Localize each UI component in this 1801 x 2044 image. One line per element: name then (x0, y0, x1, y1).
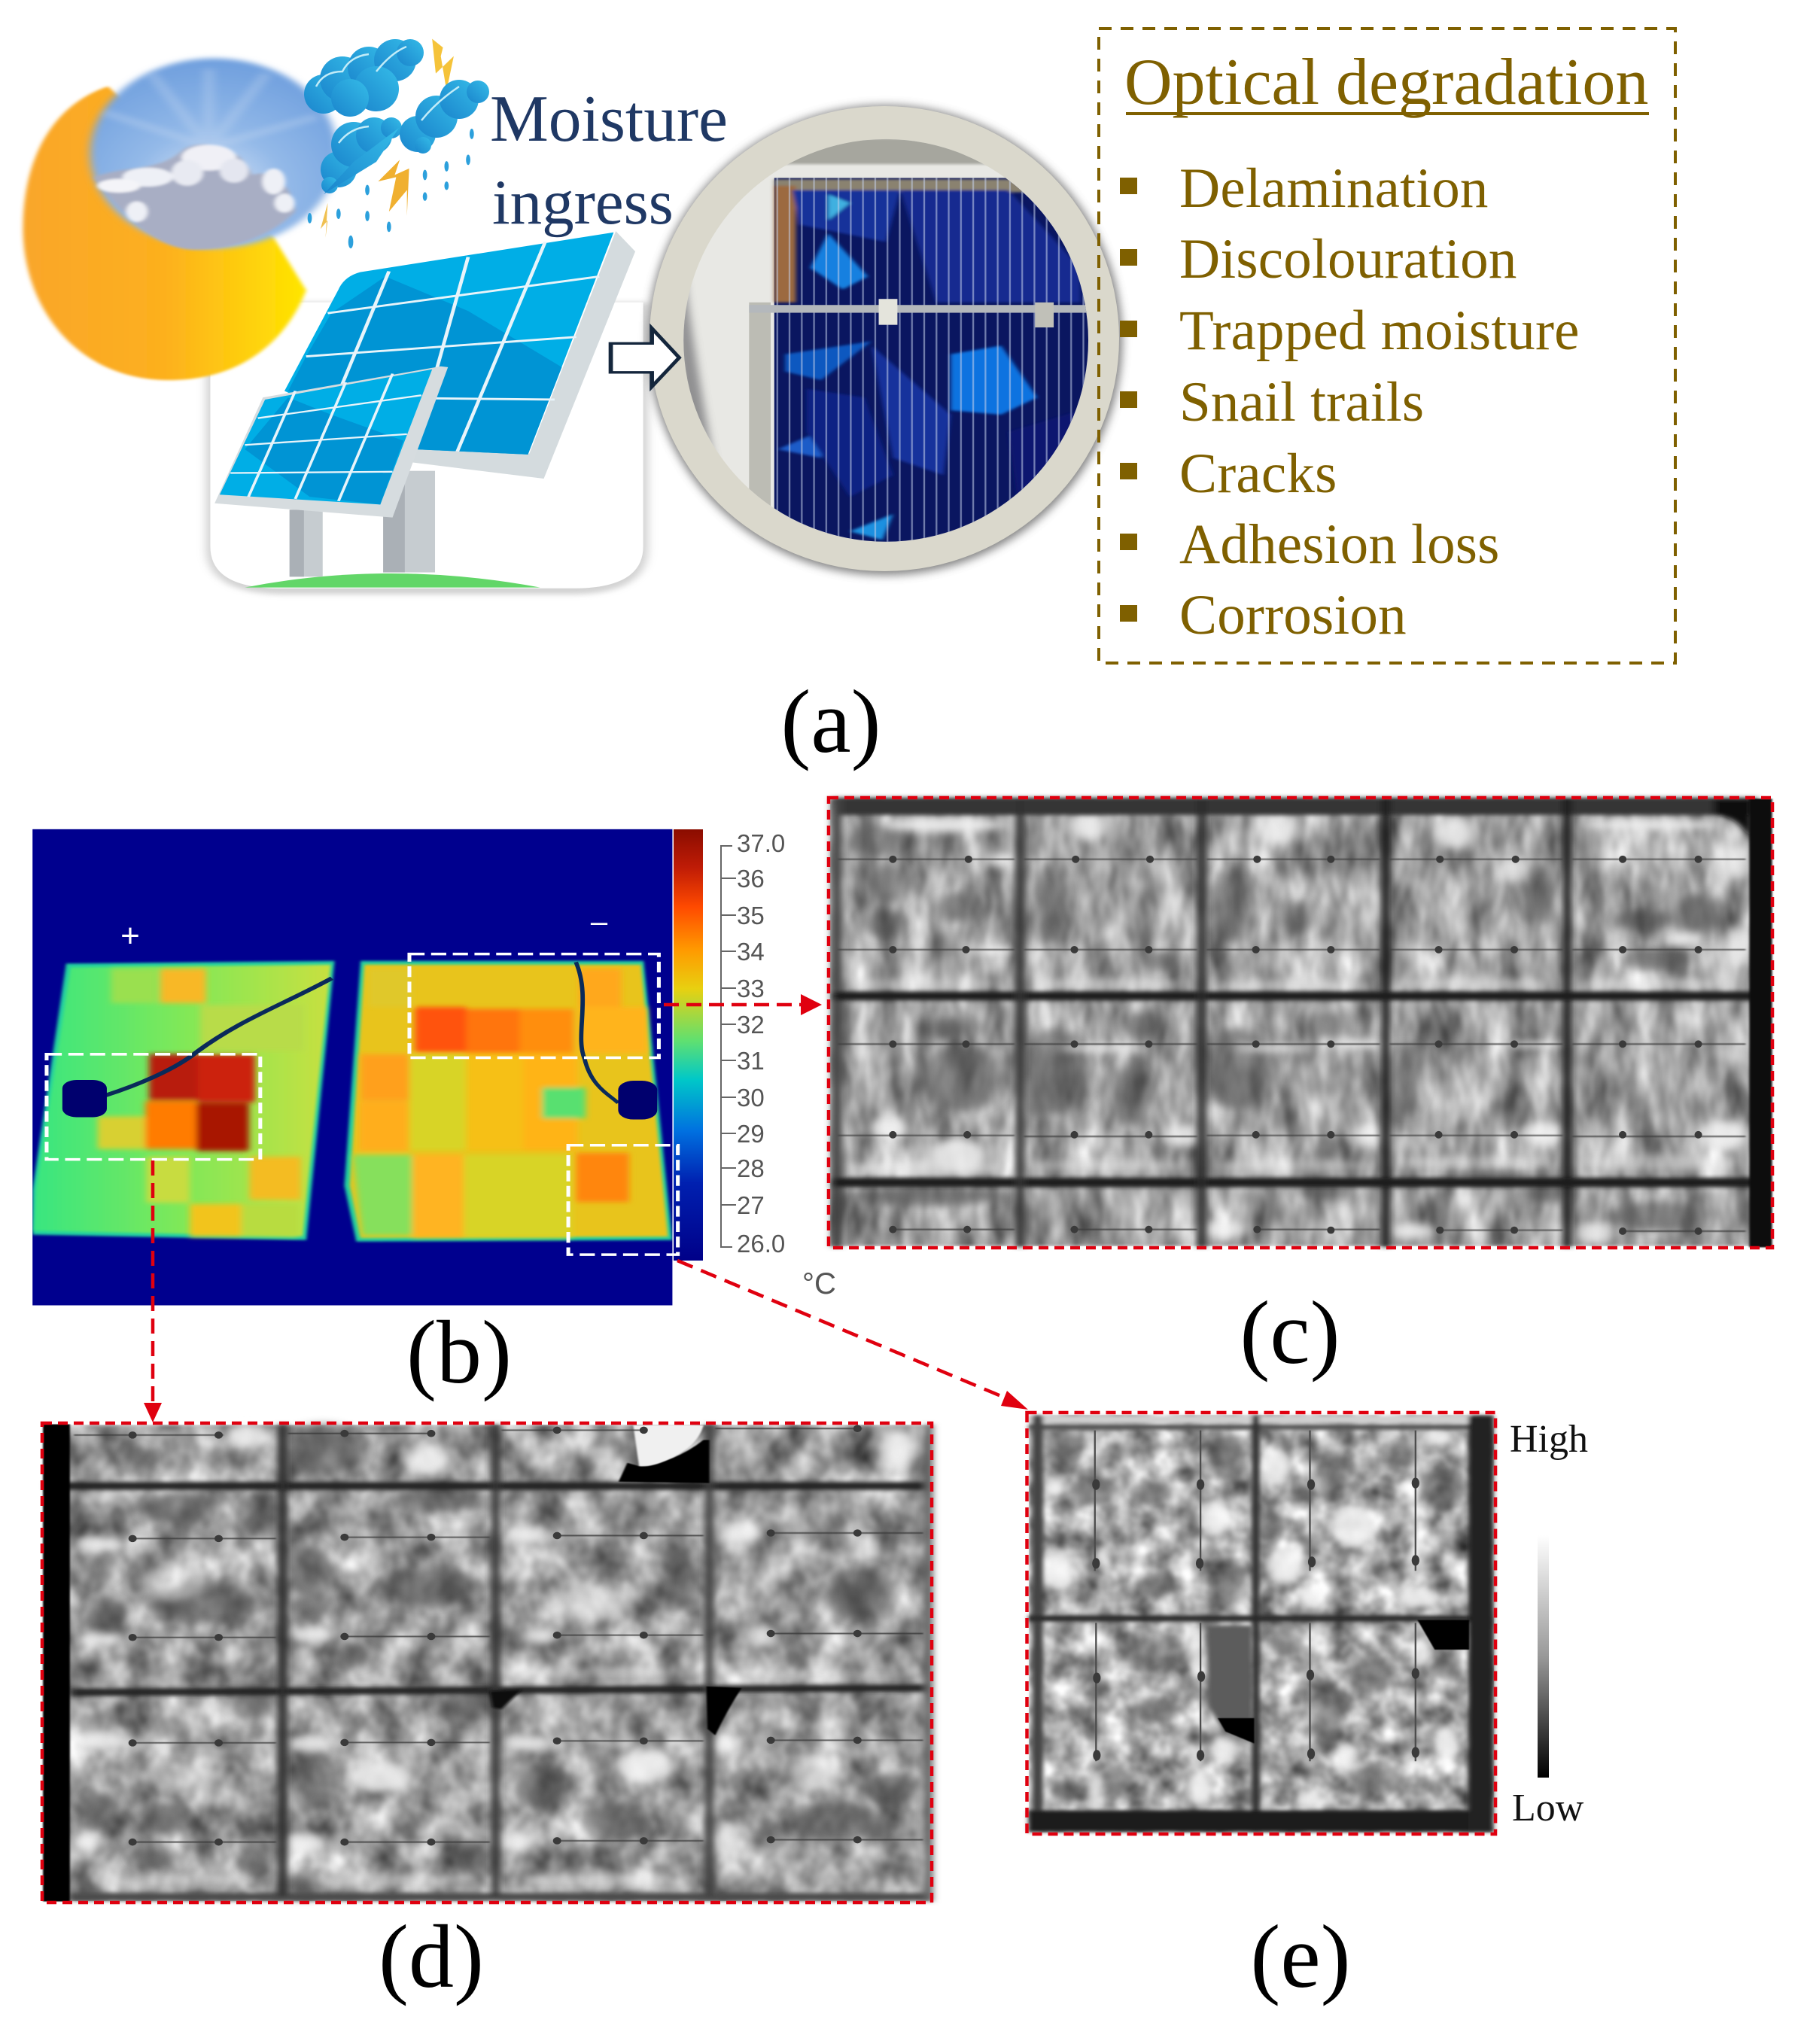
dashed frame (42, 1423, 932, 1903)
dashed frame (829, 798, 1772, 1248)
caption e: (e) (1250, 1906, 1351, 2006)
caption c: (c) (1240, 1282, 1340, 1382)
shaded cell region (1206, 1626, 1252, 1741)
list items: Discolouration (1179, 228, 1517, 290)
legend: luminescence intensity (1510, 1418, 1588, 1830)
color scale: 29 (737, 1120, 765, 1148)
big panel cells (284, 233, 613, 455)
magnifier: cell photo (648, 105, 1122, 575)
label: ingress: ingress (492, 167, 674, 238)
caption b: (b) (406, 1302, 512, 1402)
panel b: thermal image (32, 829, 836, 1305)
list bullets (1120, 178, 1137, 622)
color scale: 32 (737, 1011, 765, 1039)
color scale: 34 (737, 938, 765, 966)
polarity plus: + (120, 917, 140, 954)
color scale: 36 (737, 865, 765, 893)
arrow: thermal region to panel e (677, 1261, 1028, 1410)
unit label: °C (802, 1267, 836, 1300)
arrow: thermal region to panel c (664, 994, 822, 1015)
color scale: 37.0 (737, 829, 785, 857)
list items: Adhesion loss (1179, 513, 1500, 576)
cables and junction boxes (62, 962, 657, 1120)
stands (383, 471, 435, 573)
small panel (214, 367, 448, 518)
thermal modules (32, 829, 672, 1305)
lens ring (648, 105, 1122, 575)
right cells (369, 969, 412, 1007)
panel a: moisture ingress illustration (23, 39, 648, 595)
color scale: 28 (737, 1154, 765, 1182)
color scale: 33 (737, 975, 765, 1002)
cell photo (677, 134, 1095, 549)
list items (1179, 157, 1580, 646)
icon: lightning and rain (308, 39, 474, 248)
list items: Cracks (1179, 443, 1337, 505)
grass (245, 573, 540, 588)
label: moisture: Moisture (490, 82, 728, 155)
list items: Snail trails (1179, 371, 1424, 433)
icon: sky with cloud (90, 58, 338, 250)
selection boxes (47, 954, 678, 1255)
panel: optical degradation list (1099, 29, 1675, 663)
arrow: panel to magnified view (611, 328, 679, 387)
caption a: (a) (780, 671, 881, 771)
list items: Trapped moisture (1179, 300, 1580, 362)
color scale: 27 (737, 1191, 765, 1219)
caption d: (d) (379, 1906, 484, 2006)
left cells (111, 969, 157, 1003)
color scale: 26.0 (737, 1230, 785, 1258)
damaged corners (1218, 1620, 1469, 1744)
polarity minus: – (591, 905, 608, 938)
high label: High (1510, 1418, 1588, 1461)
solar tile background (206, 303, 648, 595)
damaged corner (490, 1425, 741, 1735)
color scale (674, 829, 785, 1261)
panel d: EL image (42, 1423, 933, 1903)
dashed frame (1027, 1413, 1495, 1834)
color scale: 30 (737, 1084, 765, 1112)
gradient bar (1538, 1535, 1549, 1778)
color scale: 31 (737, 1047, 765, 1075)
panel c: EL image (829, 798, 1772, 1248)
icon: sun (23, 87, 306, 380)
icon: storm clouds (304, 39, 489, 194)
panel e: EL image (1027, 1413, 1495, 1834)
list items: Delamination (1179, 157, 1489, 220)
low label: Low (1512, 1787, 1584, 1830)
icon: solar panels (214, 231, 635, 588)
color scale: 35 (737, 902, 765, 929)
heading: Optical degradation (1124, 46, 1648, 119)
big panel frame (410, 231, 635, 479)
list items: Corrosion (1179, 584, 1407, 646)
arrow: thermal region to panel d (144, 1160, 162, 1422)
